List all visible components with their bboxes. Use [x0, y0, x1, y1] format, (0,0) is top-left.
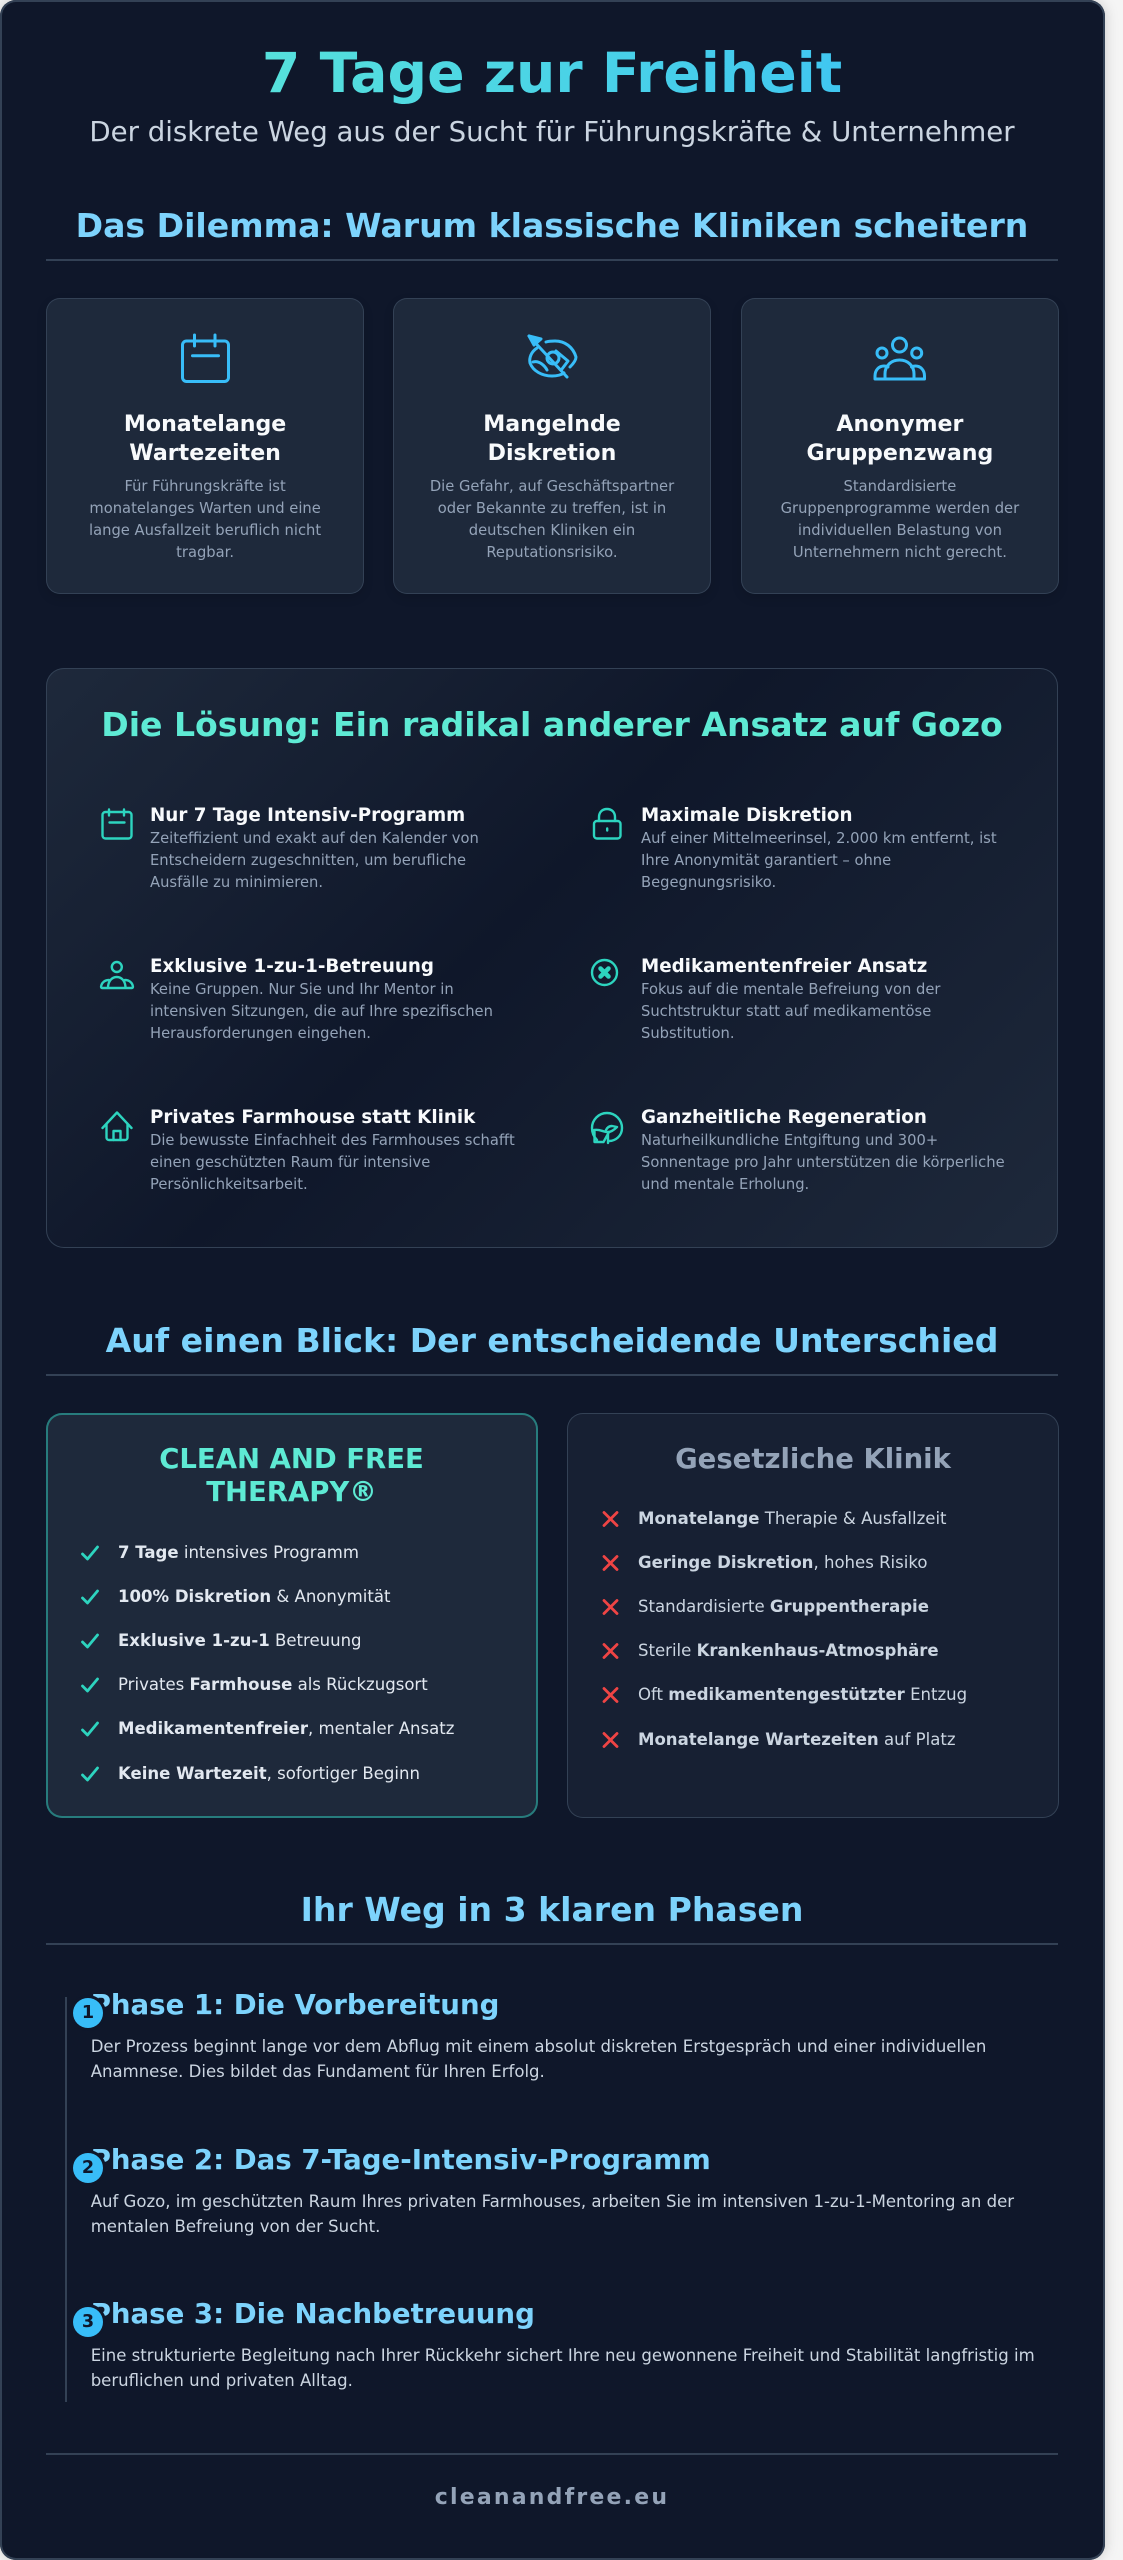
feature text: intensiven Sitzungen, die auf Ihre spezifischen [150, 1003, 493, 1020]
icon: pill circle [590, 958, 618, 986]
icon: group of people [874, 336, 926, 380]
list item: Privates Farmhouse als Rückzugsort [118, 1675, 428, 1694]
feature text: Naturheilkundliche Entgiftung und 300+ [641, 1132, 938, 1149]
phase text [91, 2034, 986, 2084]
footer: website: cleanandfree.eu [435, 2485, 669, 2510]
card title: Monatelange [124, 411, 286, 437]
phase marker [73, 1998, 103, 2028]
feature title: Medikamentenfreier Ansatz [641, 956, 927, 977]
phase text [91, 2189, 1014, 2239]
card text: lange Ausfallzeit beruflich nicht [89, 522, 321, 539]
phase marker [73, 2153, 103, 2183]
feature text: Persönlichkeitsarbeit. [150, 1176, 308, 1193]
panel: Anonymer Gruppenzwang [741, 298, 1059, 594]
feature text [150, 981, 493, 1042]
feature: Regeneration [590, 1107, 1005, 1193]
card title: Anonymer [836, 411, 963, 437]
card text [781, 478, 1020, 561]
phase text: Eine strukturierte Begleitung nach Ihrer Rückkehr sichert Ihre neu gewonnene Freiheit und Stabilität langfristig im [91, 2346, 1035, 2365]
feature text: und mentale Erholung. [641, 1176, 809, 1193]
list item: Oft medikamentengestützter Entzug [638, 1685, 967, 1704]
feature text: Sonnentage pro Jahr unterstützen die körperliche [641, 1154, 1005, 1171]
card title [483, 411, 621, 466]
phase text: mentalen Befreiung von der Sucht. [91, 2217, 380, 2236]
phase text: Der Prozess beginnt lange vor dem Abflug mit einem absolut diskreten Erstgespräch und einer individuellen [91, 2037, 986, 2056]
card title: Gruppenzwang [806, 440, 993, 466]
feature text [641, 981, 940, 1042]
feature text: Herausforderungen eingehen. [150, 1025, 371, 1042]
feature title: Ganzheitliche Regeneration [641, 1107, 927, 1128]
card text: deutschen Kliniken ein [469, 522, 635, 539]
phase 3 [73, 2298, 1063, 2408]
icon: calendar [181, 334, 230, 383]
heading: Das Dilemma: Das Dilemma: Warum klassische Kliniken scheitern [76, 206, 1028, 245]
phase text: Auf Gozo, im geschützten Raum Ihres privaten Farmhouses, arbeiten Sie im intensiven 1-zu-1-Mentoring an der [91, 2192, 1014, 2211]
icon: globe [590, 1112, 624, 1144]
card title [806, 411, 993, 466]
card text: tragbar. [176, 544, 234, 561]
card text: Gruppenprogramme werden der [781, 500, 1019, 517]
subtitle: Der diskrete Weg aus der Sucht für Führungskräfte & Unternehmer [89, 114, 1015, 148]
list item: Medikamentenfreier, mentaler Ansatz [118, 1719, 454, 1738]
feature title: Nur 7 Tage Intensiv-Programm [150, 805, 465, 826]
list item: 7 Tage intensives Programm [118, 1543, 359, 1562]
card text: Für Führungskräfte ist [124, 478, 286, 495]
feature: Diskretion [592, 805, 997, 891]
list item: Monatelange Therapie & Ausfallzeit [638, 1508, 947, 1528]
feature text: Auf einer Mittelmeerinsel, 2.000 km entfernt, ist [641, 830, 997, 847]
card title: Wartezeiten [129, 440, 281, 466]
phase title: Phase 1: Die Vorbereitung [91, 1988, 499, 2021]
card title: Mangelnde [483, 411, 621, 437]
card text [430, 478, 674, 561]
title: 7 Tage zur Freiheit [262, 42, 842, 106]
list item: Sterile Krankenhaus-Atmosphäre [638, 1641, 939, 1660]
feature text: Substitution. [641, 1025, 735, 1042]
feature text: Die bewusste Einfachheit des Farmhouses schafft [150, 1132, 515, 1149]
heading: Auf einen Blick: Auf einen Blick: Der entscheidende Unterschied [106, 1321, 998, 1360]
panel: Gesetzliche Klinik [567, 1413, 1059, 1818]
feature text [150, 830, 479, 891]
feature text [150, 1132, 515, 1193]
phase title: Phase 3: Die Nachbetreuung [91, 2297, 535, 2330]
feature title: Exklusive 1-zu-1-Betreuung [150, 956, 434, 977]
icon: house [101, 1111, 133, 1142]
list item: Standardisierte Gruppentherapie [638, 1597, 929, 1616]
phase marker: 3 [82, 2312, 94, 2332]
feature text: Begegnungsrisiko. [641, 874, 776, 891]
feature title: Maximale Diskretion [641, 805, 852, 826]
comparison title: Gesetzliche Klinik [675, 1442, 951, 1474]
icon: calendar [101, 808, 133, 840]
list item: Geringe Diskretion, hohes Risiko [638, 1553, 927, 1572]
feature: Medikamentenfrei [590, 956, 940, 1042]
feature text: Suchtstruktur statt auf medikamentöse [641, 1003, 931, 1020]
panel: Mangelnde Diskretion [393, 298, 711, 594]
phase text: Anamnese. Dies bildet das Fundament für Ihren Erfolg. [91, 2062, 545, 2081]
feature title: Privates Farmhouse statt Klinik [150, 1107, 475, 1128]
feature text: Ihre Anonymität garantiert – ohne [641, 852, 891, 869]
feature text: Entscheidern zugeschnitten, um berufliche [150, 852, 466, 869]
comparison title [159, 1443, 424, 1508]
panel: Die Lösung [46, 668, 1058, 1248]
card text: Reputationsrisiko. [486, 544, 618, 561]
timeline line [64, 1997, 66, 2402]
comparison title: THERAPY® [206, 1476, 377, 1508]
title [46, 41, 1058, 107]
phase text: beruflichen und privaten Alltag. [91, 2371, 353, 2390]
card text: monatelanges Warten und eine [89, 500, 321, 517]
feature text: Ausfälle zu minimieren. [150, 874, 323, 891]
feature: 1-zu-1 [100, 956, 493, 1042]
phase 1 [73, 1989, 1063, 2099]
heading: Ihr Weg: Ihr Weg in 3 klaren Phasen [301, 1890, 803, 1929]
heading: Die Lösung: Die Lösung: Ein radikal anderer Ansatz auf Gozo [101, 705, 1003, 744]
feature text: Zeiteffizient und exakt auf den Kalender von [150, 830, 479, 847]
feature: 7 Tage [101, 805, 479, 891]
icon: crossed-out eye [527, 334, 578, 379]
card title: Diskretion [488, 440, 616, 466]
feature text [641, 830, 997, 891]
card text: Standardisierte [844, 478, 956, 495]
feature text: einen geschützten Raum für intensive [150, 1154, 430, 1171]
card text [89, 478, 321, 561]
comparison title: CLEAN AND FREE [159, 1443, 424, 1475]
list item: Keine Wartezeit, sofortiger Beginn [118, 1764, 420, 1782]
feature text [641, 1132, 1005, 1193]
panel: Monatelange Wartezeiten [46, 298, 364, 594]
phase text [91, 2343, 1035, 2393]
card text: individuellen Belastung von [798, 522, 1002, 539]
list item: 100% Diskretion & Anonymität [118, 1587, 390, 1606]
card text: Unternehmern nicht gerecht. [793, 544, 1007, 561]
phase marker [73, 2307, 103, 2337]
icon: lock [592, 808, 622, 840]
phase marker: 2 [82, 2158, 94, 2178]
feature text: Keine Gruppen. Nur Sie und Ihr Mentor in [150, 981, 454, 998]
feature: Farmhouse [101, 1107, 515, 1193]
list item: Monatelange Wartezeiten auf Platz [638, 1730, 956, 1748]
phase 2 [73, 2144, 1063, 2254]
card text: oder Bekannte zu treffen, ist in [438, 500, 666, 517]
panel: Clean and Free Therapy [46, 1413, 538, 1818]
icon: person [100, 960, 134, 990]
list item: Exklusive 1-zu-1 Betreuung [118, 1631, 362, 1650]
card text: Die Gefahr, auf Geschäftspartner [430, 478, 674, 495]
phase title: Phase 2: Das 7-Tage-Intensiv-Programm [91, 2143, 711, 2176]
phase marker: 1 [82, 2003, 94, 2023]
feature text: Fokus auf die mentale Befreiung von der [641, 981, 940, 998]
card title [124, 411, 286, 466]
